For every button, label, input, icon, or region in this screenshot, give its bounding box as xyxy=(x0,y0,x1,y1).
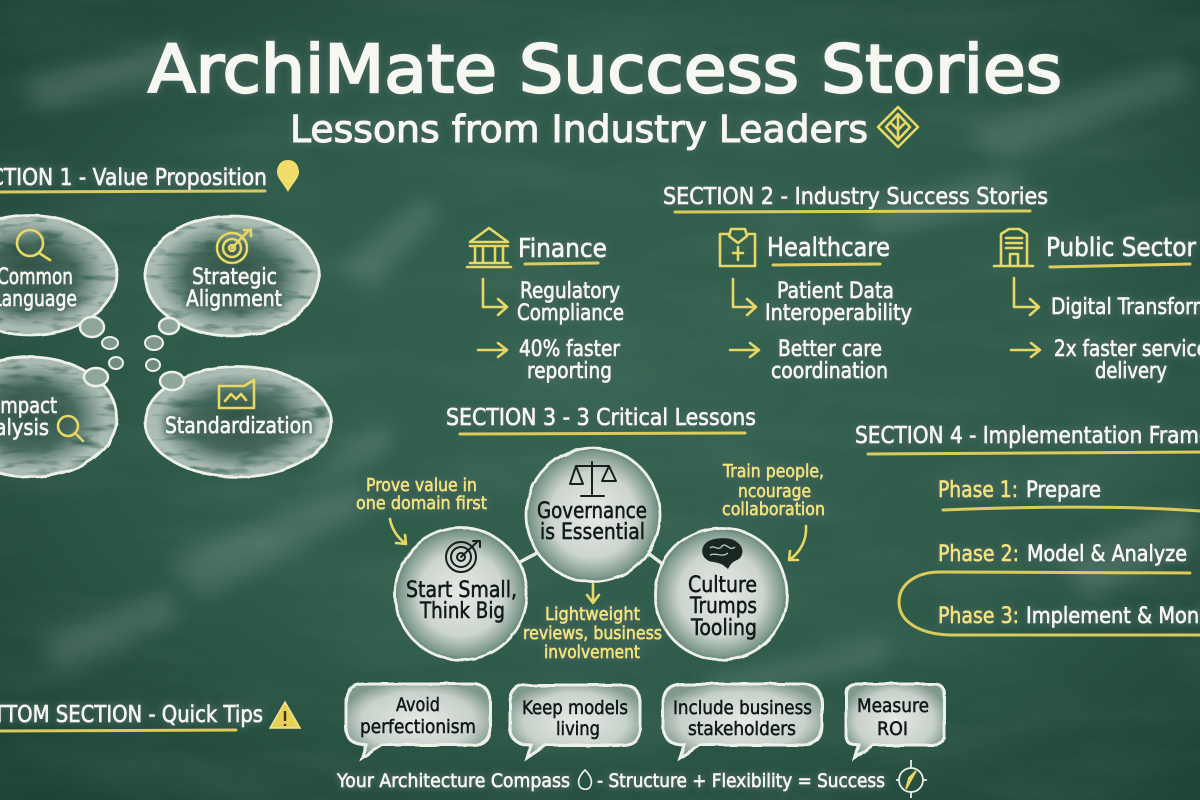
tip: include business stakeholders: stakeholders xyxy=(688,718,796,740)
tip: measure roi xyxy=(846,684,944,758)
healthcare text: coordination xyxy=(771,359,888,384)
note: train people: ncourage xyxy=(738,481,811,502)
tip: keep models living xyxy=(510,685,640,758)
icon: medical book xyxy=(720,229,755,266)
finance text: Regulatory xyxy=(520,279,620,304)
icon: compass xyxy=(896,760,927,798)
footer tagline: Your Architecture Compass xyxy=(336,770,570,792)
circle: governance: Governance xyxy=(537,499,647,524)
heading underline xyxy=(675,211,1030,212)
finance text: 40% faster xyxy=(519,337,621,362)
icon: government building xyxy=(994,229,1033,266)
tip: keep models living: Keep models xyxy=(522,697,628,719)
tip: keep models living: living xyxy=(556,718,600,740)
phase 1 underline xyxy=(943,507,1200,511)
bubble: strategic alignment: Alignment xyxy=(186,287,282,312)
circle: culture xyxy=(654,527,788,661)
healthcare text: Better care xyxy=(778,337,882,362)
phase 3: Phase 3: xyxy=(938,604,1019,629)
tip: avoid perfectionism: Avoid xyxy=(396,694,440,716)
loop connector xyxy=(899,572,1200,635)
arrow: to culture xyxy=(789,526,806,560)
bubble: standardization xyxy=(145,367,331,477)
tip: measure roi: Measure xyxy=(857,695,929,717)
phase 3 xyxy=(938,604,1200,629)
heading underline xyxy=(0,730,236,731)
bubble: common language xyxy=(0,215,123,369)
tip: include business stakeholders xyxy=(663,684,822,758)
circle: culture: Culture xyxy=(688,573,757,598)
tip: avoid perfectionism xyxy=(346,684,490,758)
arrows xyxy=(733,279,756,315)
subtitle: Lessons from Industry Leaders xyxy=(290,108,868,151)
note: lightweight reviews: involvement xyxy=(544,642,640,663)
note: prove value: one domain first xyxy=(356,493,487,514)
note: train people: Train people, xyxy=(722,461,824,482)
phase 2: Phase 2: xyxy=(938,542,1019,567)
note: prove value xyxy=(356,475,487,514)
circle: culture: Trumps xyxy=(689,594,757,619)
column: finance xyxy=(467,228,624,384)
note: train people xyxy=(722,461,825,520)
tip: include business stakeholders: Include business xyxy=(673,697,812,719)
panel: section 2 industry success stories xyxy=(467,184,1200,384)
circle: culture: Tooling xyxy=(690,616,757,641)
column: public sector xyxy=(994,229,1200,384)
phase 2 xyxy=(938,542,1187,567)
heading underline xyxy=(868,452,1200,454)
column: healthcare xyxy=(720,229,912,384)
note: lightweight reviews xyxy=(523,604,662,663)
panel: section 4 implementation framework xyxy=(855,423,1200,635)
heading: section 2: SECTION 2 - Industry Success Stories xyxy=(663,184,1048,210)
phase 1: Prepare xyxy=(1026,478,1101,503)
healthcare text: Healthcare xyxy=(767,233,890,263)
note: lightweight reviews: Lightweight xyxy=(545,604,640,625)
finance text xyxy=(517,234,624,384)
tip: avoid perfectionism: perfectionism xyxy=(360,716,476,738)
circle: governance xyxy=(525,447,661,583)
circle: start small: Think Big xyxy=(419,599,505,624)
icon: compass needle xyxy=(579,770,591,789)
icon: diamond leaf xyxy=(878,107,918,147)
public sector text xyxy=(1046,233,1200,384)
bubble: standardization: Standardization xyxy=(165,414,313,439)
arrow: to lightweight reviews xyxy=(587,584,599,603)
heading: section 3: SECTION 3 - 3 Critical Lessons xyxy=(446,405,756,431)
panel: section 1 value proposition xyxy=(0,160,331,477)
footer tagline: - Structure + Flexibility = Success xyxy=(597,770,885,792)
healthcare text xyxy=(765,233,912,384)
panel: section 3 critical lessons xyxy=(356,405,825,663)
finance text: Compliance xyxy=(517,301,624,326)
heading underline xyxy=(460,433,745,434)
icon: warning triangle xyxy=(270,702,300,728)
tip: measure roi: ROI xyxy=(877,718,908,740)
phase 1 xyxy=(938,478,1101,503)
finance text: Finance xyxy=(518,234,607,264)
bubble: strategic alignment: Strategic xyxy=(192,265,277,290)
healthcare text: Interoperability xyxy=(765,301,912,326)
healthcare text: Patient Data xyxy=(777,279,894,304)
icon: brain xyxy=(702,538,742,569)
heading underline xyxy=(0,191,265,192)
bubble: impact analysis xyxy=(0,357,117,477)
panel: bottom section quick tips xyxy=(0,684,944,758)
icon: light bulb xyxy=(277,160,299,192)
public sector text: delivery xyxy=(1095,359,1167,384)
icon: bank xyxy=(467,228,511,267)
arrow: to start small xyxy=(390,519,406,544)
phase 1: Phase 1: xyxy=(938,478,1018,503)
circle: start small xyxy=(394,527,528,661)
note: train people: collaboration xyxy=(722,499,825,520)
connectors xyxy=(520,553,673,572)
note: prove value: Prove value in xyxy=(366,475,477,496)
footer tagline xyxy=(336,770,885,792)
bubble: strategic alignment xyxy=(145,216,319,371)
circle: governance: is Essential xyxy=(540,520,645,545)
arrows xyxy=(1014,278,1039,315)
title: ArchiMate Success Stories xyxy=(148,31,1062,108)
arrows xyxy=(483,279,507,315)
circle: start small: Start Small, xyxy=(406,578,517,603)
finance text: reporting xyxy=(527,359,612,384)
note: lightweight reviews: reviews, business xyxy=(523,623,662,644)
